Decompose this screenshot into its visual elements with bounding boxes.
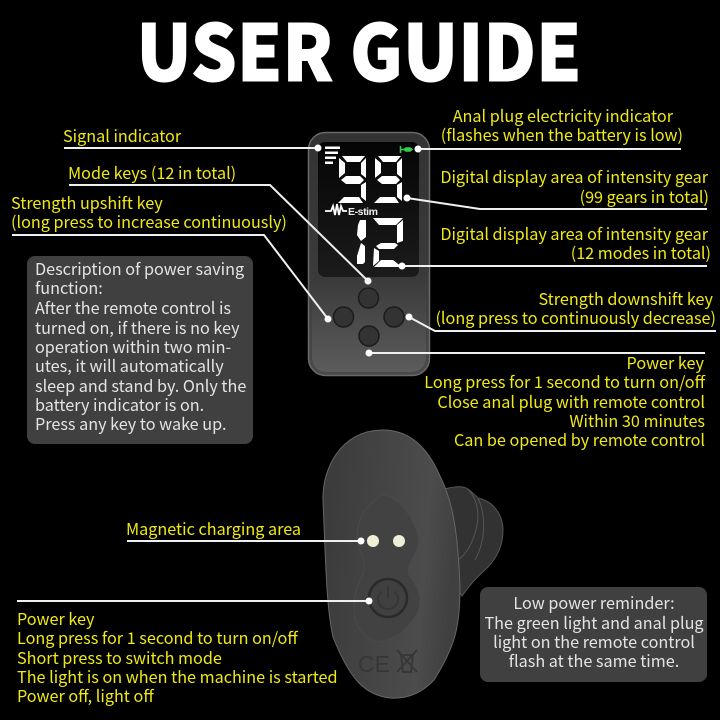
- panel: power saving description: sleep and stand by. Only the: [35, 373, 246, 397]
- label: remote power key: Close anal plug with remote control: [437, 389, 705, 413]
- panel: low power reminder: [480, 587, 707, 682]
- panel: low power reminder: flash at the same time.: [509, 648, 679, 672]
- label: magnetic charging area: Magnetic charging area: [126, 516, 301, 540]
- charging zone outline: [354, 495, 420, 641]
- panel: power saving description: function:: [35, 275, 103, 299]
- label: intensity gear 99: (99 gears in total): [580, 184, 709, 208]
- label: intensity gear 99: [440, 164, 709, 208]
- charging pins: [367, 535, 379, 547]
- label: intensity gear 12: [440, 221, 711, 264]
- label: plug power key: Power key: [17, 606, 95, 630]
- label: remote power key: Power key: [627, 350, 705, 374]
- label: signal indicator: Signal indicator: [63, 123, 182, 147]
- leader lines: [12, 144, 716, 604]
- label: plug power key: Long press for 1 second to turn on/off: [17, 625, 298, 649]
- label: remote power key: Long press for 1 second to turn on/off: [424, 369, 706, 393]
- panel: power saving description: Description of power saving: [35, 256, 244, 280]
- power button: [369, 579, 407, 617]
- digit 1: [357, 220, 366, 264]
- label: anal plug electricity indicator: Anal plug electricity indicator: [453, 103, 674, 127]
- label: anal plug electricity indicator: [441, 103, 683, 146]
- label: anal plug electricity indicator: (flashes when the battery is low): [441, 122, 683, 146]
- lower panel: [312, 272, 426, 372]
- E-stim label: E-stim: [348, 206, 378, 218]
- panel: power saving description: utes, it will automatically: [35, 353, 224, 377]
- panel: power saving description: operation within two min-: [35, 334, 231, 358]
- buttons: [334, 288, 404, 346]
- label: strength downshift key: [435, 286, 716, 329]
- label: strength upshift key: (long press to increase continuously): [11, 209, 287, 233]
- label: intensity gear 12: Digital display area of intensity gear: [440, 221, 709, 245]
- plug body: [323, 430, 460, 698]
- digit 9 second: [374, 156, 402, 203]
- plug stem: [440, 487, 503, 596]
- label: strength downshift key: (long press to continuously decrease): [435, 305, 716, 329]
- panel: power saving description: Press any key to wake up.: [35, 411, 226, 435]
- CE mark: CE: [358, 651, 390, 677]
- label: strength upshift key: [11, 190, 287, 233]
- label: intensity gear 12: (12 modes in total): [571, 240, 711, 264]
- digit 2: [373, 218, 403, 267]
- icon: green plug battery: [400, 146, 412, 153]
- icon: power symbol: [378, 586, 398, 609]
- icon: signal bars: [325, 146, 340, 164]
- panel: power saving description: After the remote control is: [35, 295, 231, 319]
- remote control: [308, 132, 430, 376]
- panel: low power reminder: The green light and anal plug: [484, 610, 704, 634]
- label: plug power key: [17, 606, 338, 707]
- panel: power saving description: [27, 256, 253, 444]
- label: mode keys: Mode keys (12 in total): [68, 160, 236, 184]
- label: intensity gear 99: Digital display area of intensity gear: [440, 164, 709, 188]
- screen: [318, 142, 419, 277]
- panel: power saving description: turned on, if there is no key: [35, 315, 240, 339]
- label: plug power key: Power off, light off: [17, 683, 154, 707]
- panel: low power reminder: light on the remote control: [493, 629, 695, 653]
- plug device: [323, 430, 503, 698]
- label: strength downshift key: Strength downshift key: [538, 286, 714, 310]
- icon: crossed bin: [397, 650, 417, 672]
- label: plug power key: Short press to switch mode: [17, 645, 222, 669]
- label: remote power key: Within 30 minutes: [569, 408, 705, 432]
- remote body: [308, 132, 430, 376]
- panel: low power reminder: Low power reminder:: [513, 590, 675, 614]
- label: remote power key: [424, 350, 706, 451]
- digit 9 first: [338, 156, 366, 203]
- icon: pulse wave: [325, 204, 347, 215]
- label: strength upshift key: Strength upshift key: [11, 190, 163, 214]
- panel: power saving description: battery indicator is on.: [35, 392, 204, 416]
- label: remote power key: Can be opened by remote control: [454, 427, 705, 451]
- label: plug power key: The light is on when the machine is started: [17, 664, 338, 688]
- stem ridge: [458, 489, 484, 560]
